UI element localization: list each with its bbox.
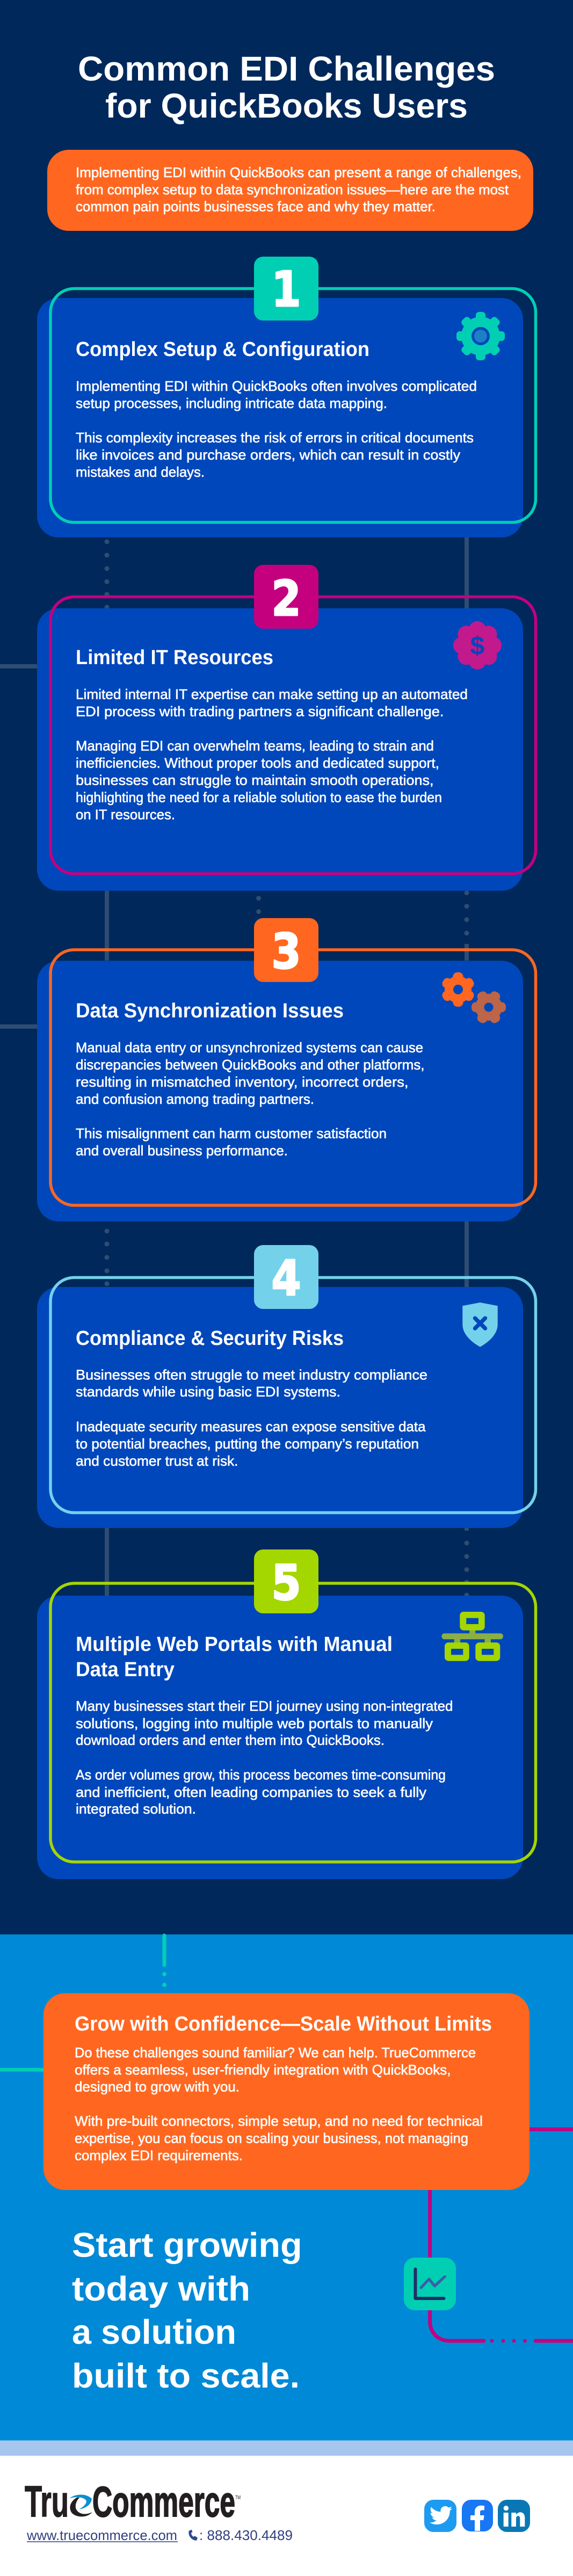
heading: Compliance & Security Risks bbox=[76, 1327, 344, 1350]
callout heading: Grow with Confidence—Scale Without Limits bbox=[75, 2013, 492, 2035]
body text: Implementing EDI within QuickBooks often involves complicated bbox=[76, 378, 477, 394]
title: Common EDI Challenges bbox=[78, 49, 495, 88]
body text bbox=[76, 1039, 425, 1159]
body text: setup processes, including intricate data mapping. bbox=[76, 395, 387, 411]
heading: Multiple Web Portals with Manual bbox=[76, 1633, 393, 1656]
panel: intro callout: Implementing EDI within QuickBooks can present a range of challenges, bbox=[76, 164, 521, 180]
icon: twitter bbox=[424, 2500, 456, 2532]
icon: linkedin bbox=[498, 2500, 530, 2532]
body text: and inefficient, often leading companies to seek a fully bbox=[76, 1784, 426, 1800]
panel: challenge 2 limited IT resources bbox=[37, 565, 536, 891]
number badge 5: 5 bbox=[272, 1555, 301, 1611]
panel: challenge 3 data synchronization bbox=[37, 918, 536, 1221]
heading: Data Entry bbox=[76, 1658, 175, 1681]
panel: intro callout: common pain points businesses face and why they matter. bbox=[76, 199, 436, 215]
body text: Manual data entry or unsynchronized systems can cause bbox=[76, 1039, 423, 1056]
light band divider bbox=[0, 2441, 573, 2456]
body text: Inadequate security measures can expose sensitive data bbox=[76, 1418, 426, 1435]
body text: businesses can struggle to maintain smooth operations, bbox=[76, 772, 434, 788]
icon: facebook bbox=[462, 2500, 493, 2531]
callout body text: designed to grow with you. bbox=[75, 2079, 240, 2095]
body text: resulting in mismatched inventory, incorrect orders, bbox=[76, 1074, 408, 1090]
panel: challenge 4 compliance and security bbox=[37, 1245, 536, 1528]
icon: two gears bbox=[441, 972, 506, 1024]
panel: footer bbox=[0, 2456, 573, 2576]
contact: website: www.truecommerce.com bbox=[26, 2527, 177, 2543]
call to action heading: Start growing bbox=[72, 2226, 302, 2265]
panel: intro callout: from complex setup to data synchronization issues—here are the most bbox=[76, 181, 509, 198]
callout body text: Do these challenges sound familiar? We can help. TrueCommerce bbox=[75, 2044, 476, 2061]
panel: blue closing section background bbox=[0, 1934, 573, 2441]
logo: TrueCommerce: TM bbox=[235, 2495, 241, 2501]
body text: Many businesses start their EDI journey using non-integrated bbox=[76, 1698, 453, 1714]
heading: Complex Setup & Configuration bbox=[76, 338, 369, 361]
icon: shield with x bbox=[462, 1302, 498, 1347]
body text: to potential breaches, putting the company’s reputation bbox=[76, 1436, 419, 1452]
number badge 1 bbox=[254, 257, 318, 321]
call to action heading: built to scale. bbox=[72, 2356, 300, 2395]
icon: dollar badge bbox=[453, 621, 502, 670]
contact: phone: : 888.430.4489 bbox=[199, 2527, 293, 2543]
body text: This complexity increases the risk of errors in critical documents bbox=[76, 430, 474, 446]
title: for QuickBooks Users bbox=[105, 86, 468, 125]
logo: TrueCommerce bbox=[25, 2477, 241, 2526]
number badge 2: 2 bbox=[272, 571, 301, 627]
body text: integrated solution. bbox=[76, 1801, 196, 1817]
body text: As order volumes grow, this process becomes time-consuming bbox=[76, 1767, 446, 1783]
callout body text bbox=[75, 2044, 483, 2164]
callout body text: complex EDI requirements. bbox=[75, 2148, 243, 2164]
body text: like invoices and purchase orders, which can result in costly bbox=[76, 447, 460, 463]
icon: dollar badge: $ bbox=[470, 632, 485, 660]
heading: Data Synchronization Issues bbox=[76, 1000, 344, 1022]
logo: TrueCommerce: Commerce bbox=[92, 2478, 235, 2526]
number badge 5 bbox=[254, 1549, 318, 1613]
body text: mistakes and delays. bbox=[76, 464, 205, 480]
callout body text: expertise, you can focus on scaling your business, not managing bbox=[75, 2130, 468, 2146]
logo: TrueCommerce: Tru bbox=[25, 2477, 69, 2526]
panel: intro callout bbox=[47, 150, 533, 231]
body text bbox=[76, 378, 477, 480]
call to action heading bbox=[72, 2226, 302, 2395]
body text: This misalignment can harm customer satisfaction bbox=[76, 1125, 387, 1141]
callout body text: With pre-built connectors, simple setup, and no need for technical bbox=[75, 2113, 483, 2129]
panel: challenge 5 multiple web portals bbox=[37, 1549, 536, 1879]
body text: Managing EDI can overwhelm teams, leading to strain and bbox=[76, 738, 434, 754]
body text: on IT resources. bbox=[76, 806, 175, 823]
body text bbox=[76, 1698, 453, 1817]
body text: and customer trust at risk. bbox=[76, 1453, 238, 1469]
body text: solutions, logging into multiple web portals to manually bbox=[76, 1715, 433, 1731]
number badge 3: 3 bbox=[272, 923, 301, 980]
body text bbox=[76, 686, 468, 823]
call to action heading: a solution bbox=[72, 2313, 236, 2352]
body text: Businesses often struggle to meet industry compliance bbox=[76, 1367, 427, 1383]
icon: growth chart bbox=[404, 2258, 456, 2310]
body text: standards while using basic EDI systems. bbox=[76, 1384, 340, 1400]
icon: network bbox=[441, 1612, 503, 1661]
callout body text: offers a seamless, user-friendly integration with QuickBooks, bbox=[75, 2062, 451, 2078]
number badge 3 bbox=[254, 918, 318, 982]
heading bbox=[76, 1633, 393, 1681]
body text: inefficiencies. Without proper tools and dedicated support, bbox=[76, 755, 439, 771]
icon: gear bbox=[456, 312, 505, 360]
number badge 4: 4 bbox=[272, 1250, 301, 1307]
body text: download orders and enter them into QuickBooks. bbox=[76, 1732, 385, 1748]
body text: Limited internal IT expertise can make setting up an automated bbox=[76, 686, 468, 702]
call to action heading: today with bbox=[72, 2269, 250, 2308]
body text bbox=[76, 1367, 427, 1469]
body text: highlighting the need for a reliable solution to ease the burden bbox=[76, 789, 442, 805]
number badge 2 bbox=[254, 565, 318, 629]
title bbox=[78, 49, 495, 125]
body text: discrepancies between QuickBooks and other platforms, bbox=[76, 1057, 425, 1073]
panel: challenge 1 complex setup bbox=[37, 257, 536, 537]
number badge 4 bbox=[254, 1245, 318, 1309]
heading: Limited IT Resources bbox=[76, 646, 273, 669]
number badge 1: 1 bbox=[272, 261, 301, 318]
body text: EDI process with trading partners a significant challenge. bbox=[76, 703, 444, 719]
body text: and overall business performance. bbox=[76, 1143, 288, 1159]
body text: and confusion among trading partners. bbox=[76, 1091, 314, 1107]
panel: grow with confidence callout bbox=[43, 1993, 530, 2190]
